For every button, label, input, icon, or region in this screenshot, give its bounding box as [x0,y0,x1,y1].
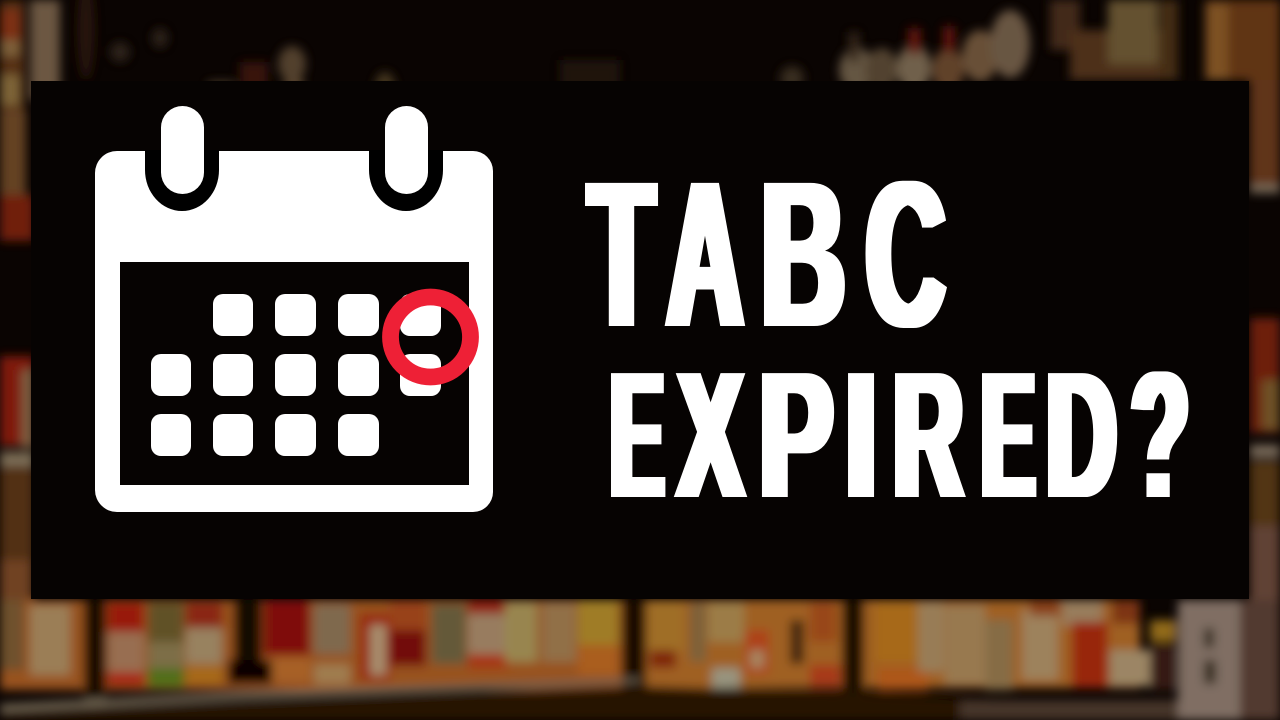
counter [0,686,1178,720]
heading line 2: R [894,335,963,536]
heading: TABC EXPIRED? [589,139,1189,536]
red circle marker [390,297,470,377]
heading line 2: P [760,335,833,536]
calendar body [95,151,493,512]
heading line 2: E [982,335,1034,536]
panel: dark overlay [31,81,1249,599]
heading line 1: A [667,139,743,371]
icon: calendar [95,106,493,512]
calendar date cells [151,294,441,456]
bottle row [0,600,640,690]
right edge strip [1205,0,1280,80]
heading line 1: T [589,139,654,371]
heading line 2: X [678,335,743,536]
heading line 2: E [611,335,664,536]
dim top bottles right [780,66,804,90]
heading line 1: B [761,139,845,371]
heading line 2: D [1046,335,1116,536]
heading line 2: I [846,335,876,536]
calendar rings [145,106,443,211]
heading line 1: C [866,139,945,371]
heading line 2: ? [1131,335,1189,536]
posts [84,600,106,720]
dim top bottles left [77,0,95,80]
left edge strip [0,0,24,240]
